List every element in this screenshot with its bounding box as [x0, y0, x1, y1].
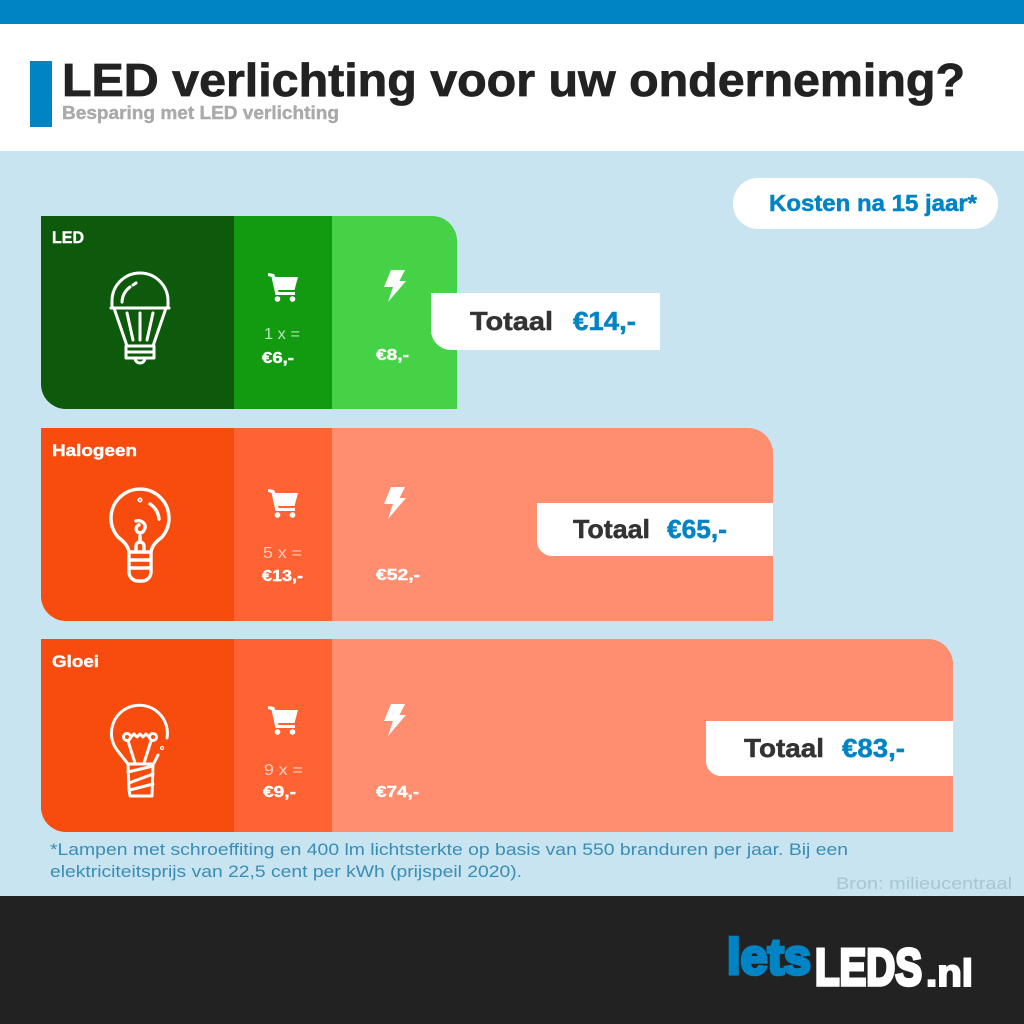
icon: halogen bulb [111, 489, 169, 581]
callout: kosten na 15 jaar [733, 178, 998, 229]
panel: Halogeen [41, 428, 773, 621]
panel: Gloei: €9,- [263, 784, 296, 801]
icon: bolt [384, 704, 406, 736]
footnote: *Lampen met schroeffiting en 400 lm lichtsterkte op basis van 550 branduren per jaar. Bij een [50, 841, 848, 859]
total: LED: €14,- [573, 306, 636, 336]
total: Halogeen: Totaal [573, 514, 650, 544]
title: LED verlichting voor uw onderneming? [62, 54, 965, 106]
total: Gloei [706, 721, 953, 776]
logo [727, 929, 973, 997]
purchase cost: 9 x = [264, 762, 303, 779]
total: Gloei: Totaal [744, 733, 824, 763]
background panel [0, 151, 1024, 896]
icon: cart [268, 489, 298, 518]
logo: .nl [926, 953, 973, 995]
label: Halogeen [52, 441, 137, 460]
icon: bolt [384, 487, 406, 519]
total: Halogeen: €65,- [667, 514, 727, 544]
icon: cart [268, 706, 298, 735]
label: Gloei [52, 652, 99, 671]
panel: LED: €6,- [262, 350, 294, 367]
panel: Halogeen: €13,- [262, 568, 303, 585]
logo: lets [727, 929, 811, 985]
subtitle: Besparing met LED verlichting [62, 103, 339, 123]
icon: LED bulb [111, 273, 169, 363]
total: LED: Totaal [470, 306, 553, 336]
energy cost: €52,- [376, 567, 420, 584]
top bar [0, 0, 1024, 24]
title accent [30, 61, 52, 127]
purchase cost: 1 x = [264, 326, 300, 343]
total: Gloei: €83,- [842, 733, 905, 763]
panel: Gloei [41, 639, 953, 832]
label: LED [52, 229, 84, 247]
panel: LED [41, 216, 457, 409]
footnote [50, 841, 848, 881]
header [0, 24, 1024, 151]
energy cost: €74,- [376, 784, 419, 801]
icon: cart [268, 273, 298, 302]
total: LED [431, 293, 660, 350]
icon: bolt [384, 270, 406, 302]
callout: kosten na 15 jaar: Kosten na 15 jaar* [769, 190, 977, 216]
logo: LEDS [815, 939, 922, 997]
energy cost: €8,- [376, 347, 409, 364]
footnote: elektriciteitsprijs van 22,5 cent per kWh (prijspeil 2020). [50, 863, 522, 881]
total: Halogeen [537, 503, 773, 556]
purchase cost: 5 x = [263, 545, 302, 562]
icon: incandescent bulb [111, 705, 167, 796]
footer [0, 896, 1024, 1024]
source: Bron: milieucentraal [836, 875, 1012, 893]
